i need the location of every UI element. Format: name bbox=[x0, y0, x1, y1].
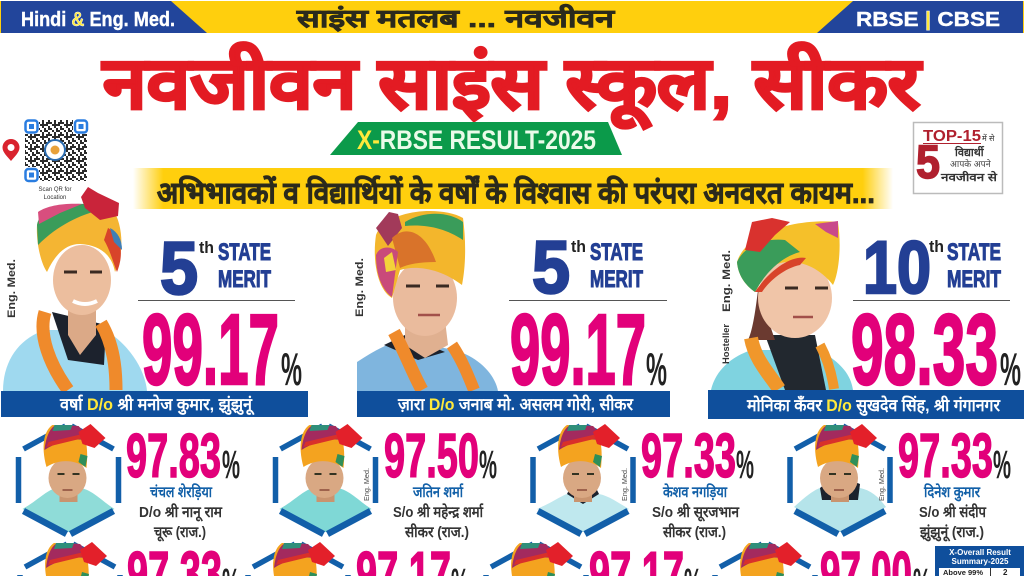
name and parent: चूरू (राज.) bbox=[153, 524, 206, 542]
slogan: साइंस मतलब ... नवजीवन bbox=[296, 4, 616, 33]
state merit rank: MERIT bbox=[218, 266, 271, 293]
top banner bbox=[0, 1, 1024, 33]
score: 99.17 bbox=[510, 294, 646, 406]
score: % bbox=[646, 343, 667, 395]
state merit rank bbox=[138, 227, 295, 310]
panel: topper 3 bbox=[708, 218, 1024, 419]
board tag bbox=[817, 1, 1023, 33]
hex portrait bbox=[486, 542, 586, 576]
name and parent: दिनेश कुमार bbox=[923, 483, 981, 502]
name band: ज़ारा D/o जनाब मो. असलम गोरी, सीकर bbox=[397, 394, 634, 414]
name and parent: S/o श्री सूरजभान bbox=[652, 503, 740, 522]
name band bbox=[357, 391, 670, 417]
name and parent: सीकर (राज.) bbox=[404, 523, 469, 541]
panel: topper 2 bbox=[354, 211, 670, 417]
top-15 callout bbox=[914, 122, 1002, 194]
student: Dinesh bbox=[790, 422, 1011, 542]
hex portrait bbox=[276, 424, 376, 534]
title: नवजीवन साइंस स्कूल, सीकर bbox=[101, 42, 923, 130]
name and parent bbox=[652, 483, 740, 541]
hex portrait bbox=[790, 424, 890, 534]
state merit rank: th bbox=[571, 237, 586, 256]
name and parent: सीकर (राज.) bbox=[662, 523, 726, 541]
name and parent: चंचल शेरड़िया bbox=[149, 483, 213, 501]
name band: वर्षा D/o श्री मनोज कुमार, झुंझुनूं bbox=[59, 394, 255, 416]
state merit rank: 5 bbox=[160, 227, 198, 310]
hex portrait bbox=[715, 542, 815, 576]
top-15 callout: TOP-15 bbox=[923, 128, 981, 145]
QR code: Location bbox=[44, 195, 66, 201]
score: % bbox=[281, 343, 302, 395]
top-15 callout: आपके अपने bbox=[950, 158, 992, 169]
state merit rank: 10 bbox=[863, 226, 931, 309]
state merit rank: STATE bbox=[947, 239, 1001, 266]
name and parent bbox=[139, 483, 223, 542]
score: 97.33 bbox=[641, 422, 736, 491]
name and parent: झुंझुनूं (राज.) bbox=[919, 524, 984, 542]
result ribbon: X-RBSE RESULT-2025 bbox=[357, 125, 596, 155]
hex portrait bbox=[20, 542, 120, 576]
hex portrait bbox=[248, 542, 348, 576]
name and parent: S/o श्री महेन्द्र शर्मा bbox=[393, 503, 484, 521]
state merit rank: STATE bbox=[218, 239, 271, 266]
hex portrait bbox=[533, 424, 633, 534]
QR code bbox=[2, 119, 88, 201]
result summary table bbox=[935, 546, 1024, 576]
name band bbox=[1, 391, 308, 417]
name and parent bbox=[393, 483, 484, 541]
medium label: Eng. Med. bbox=[622, 468, 629, 501]
location pin bbox=[2, 139, 20, 161]
state merit rank bbox=[509, 226, 667, 309]
name and parent: D/o श्री नानू राम bbox=[139, 503, 223, 522]
top-15 callout: विद्यार्थी bbox=[954, 145, 985, 159]
tagline band: अभिभावकों व विद्यार्थियों के वर्षों के विश्वास की परंपरा अनवरत कायम... bbox=[157, 175, 875, 210]
score bbox=[510, 294, 667, 406]
score: % bbox=[479, 443, 497, 487]
top-15 callout: 5 bbox=[916, 135, 940, 188]
student row 2: first bbox=[20, 540, 240, 576]
score: 97.83 bbox=[126, 422, 221, 491]
medium label: Eng. Med. bbox=[6, 259, 18, 318]
name and parent bbox=[919, 483, 987, 542]
yellow slogan strip bbox=[0, 1, 1024, 33]
medium label: Eng. Med. bbox=[364, 468, 371, 501]
state merit rank: 5 bbox=[532, 226, 570, 309]
state merit rank: th bbox=[199, 238, 214, 257]
score: 99.17 bbox=[142, 294, 279, 406]
score: % bbox=[222, 443, 240, 487]
name band: मोनिका कँवर D/o सुखदेव सिंह, श्री गंगानगर bbox=[746, 395, 1001, 416]
portrait: Varsha bbox=[3, 187, 147, 391]
hosteller label: Hosteller bbox=[721, 323, 731, 364]
score: % bbox=[736, 443, 754, 487]
score: 97.50 bbox=[384, 422, 479, 491]
name and parent: S/o श्री संदीप bbox=[919, 503, 987, 521]
student: Chanchal bbox=[18, 422, 240, 542]
state merit rank: MERIT bbox=[947, 266, 1001, 293]
result summary table: X-Overall Result bbox=[949, 548, 1011, 557]
hex portrait bbox=[18, 424, 118, 534]
portrait: Zara bbox=[357, 211, 498, 391]
student: Keshav bbox=[533, 422, 754, 541]
board tag: RBSE | CBSE bbox=[856, 9, 1000, 31]
medium label: Eng. Med. bbox=[879, 468, 886, 501]
name and parent: जतिन शर्मा bbox=[412, 483, 464, 501]
student row 2: second bbox=[248, 540, 469, 576]
second student row, cut off by the frame bbox=[17, 540, 931, 576]
portrait: Monika bbox=[711, 218, 853, 390]
state merit rank bbox=[853, 226, 1010, 309]
panel: topper 1 bbox=[1, 187, 308, 417]
score bbox=[142, 294, 302, 406]
medium tag: Hindi & Eng. Med. bbox=[21, 9, 175, 31]
QR caption: Scan QR for bbox=[38, 187, 72, 193]
state merit rank: MERIT bbox=[590, 266, 643, 293]
state merit rank: th bbox=[929, 237, 944, 256]
name and parent: केशव नगड़िया bbox=[662, 483, 728, 501]
state merit rank: STATE bbox=[590, 239, 643, 266]
medium tag bbox=[1, 1, 207, 33]
QR pattern bbox=[24, 119, 88, 182]
student: Jatin bbox=[276, 422, 497, 541]
top-15 callout: में से bbox=[982, 133, 995, 143]
student row 2: fourth bbox=[715, 540, 931, 576]
top-15 callout: नवजीवन से bbox=[940, 170, 998, 184]
student row 2: third bbox=[486, 540, 702, 576]
name band bbox=[708, 390, 1024, 419]
result summary table: Summary-2025 bbox=[952, 557, 1009, 566]
medium label: Eng. Med. bbox=[354, 258, 366, 317]
medium label: Eng. Med. bbox=[721, 250, 733, 312]
